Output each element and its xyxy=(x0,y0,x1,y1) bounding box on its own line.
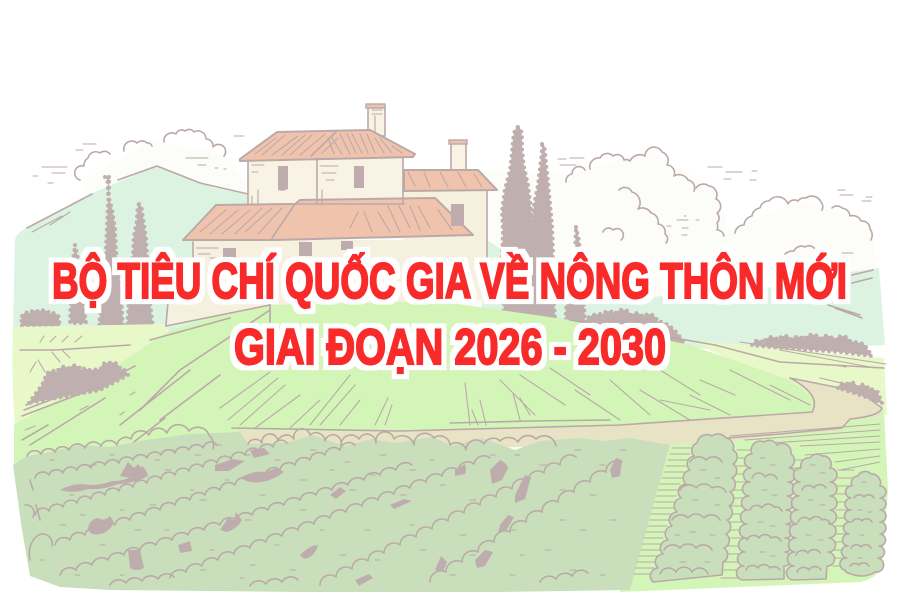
wall outlines and brickwork xyxy=(193,158,487,262)
vine outlines xyxy=(25,425,622,586)
dirt road xyxy=(232,378,882,448)
windows xyxy=(223,166,464,258)
furrows between vine rows xyxy=(630,442,854,590)
roof: right wing xyxy=(404,170,497,191)
vine shadow patches xyxy=(60,448,622,586)
row 1 xyxy=(650,434,737,582)
row 2 xyxy=(736,440,796,580)
bush: right ridge xyxy=(752,335,872,356)
main vineyard block xyxy=(13,432,670,592)
bush: left field xyxy=(29,362,128,403)
main green hill xyxy=(14,300,815,470)
lower walls xyxy=(166,190,488,326)
back field right xyxy=(690,340,887,415)
roof: lower xyxy=(183,198,473,240)
right mint band xyxy=(480,240,885,350)
vineyard rows xyxy=(13,425,670,592)
background bushes xyxy=(29,335,882,403)
vine rows on the right xyxy=(650,434,886,582)
row chains xyxy=(35,442,217,478)
roof: upper xyxy=(240,130,415,161)
back field left xyxy=(12,324,170,425)
title xyxy=(52,252,847,375)
upper walls xyxy=(248,158,404,206)
house xyxy=(166,104,497,326)
chimney right xyxy=(449,140,467,171)
right cloud outlines xyxy=(566,147,724,236)
lower right green strip xyxy=(610,410,888,592)
right field furrows xyxy=(730,424,880,470)
row 4 xyxy=(840,472,886,576)
row 3 xyxy=(786,454,837,580)
right cypress group xyxy=(502,127,534,325)
left cloud outlines xyxy=(75,129,226,180)
background: pale sky and cloud wash xyxy=(80,140,878,310)
hill hatching lines xyxy=(20,305,886,445)
left mountain xyxy=(13,166,250,330)
left cypress group xyxy=(99,177,123,325)
cypress trees behind the house xyxy=(21,127,689,358)
vine leaf marks xyxy=(40,445,626,578)
green fields xyxy=(12,300,888,592)
clouds xyxy=(33,129,872,254)
chimney left xyxy=(366,104,385,136)
title line 2: GIAI ĐOẠN 2026 - 2030 xyxy=(234,319,666,375)
bush: road bend xyxy=(838,382,882,403)
panel: mint mountains xyxy=(13,166,885,350)
